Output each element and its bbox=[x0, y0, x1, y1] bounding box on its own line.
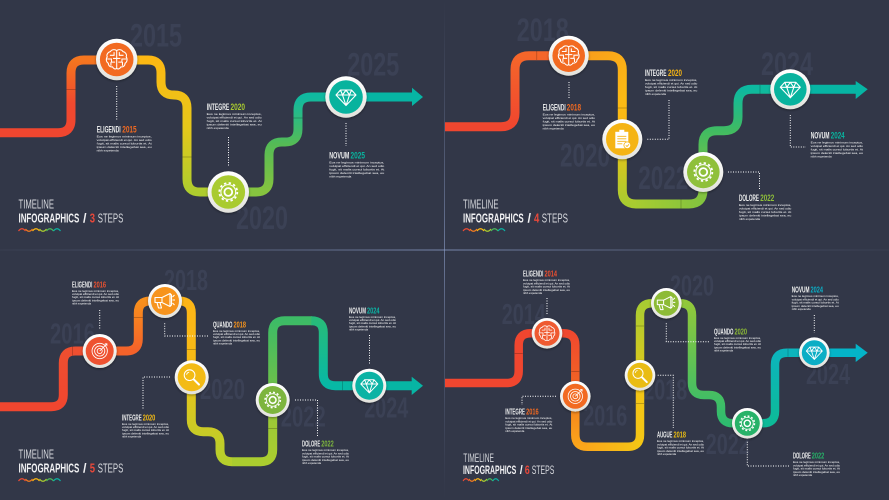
text block: Novum 2024: ipsum deleniti intellegebat sea, eu bbox=[349, 324, 396, 328]
roadmap path 5 steps bbox=[0, 301, 423, 462]
roadmap path 3 steps bbox=[0, 60, 423, 192]
text block: Integre 2020 bbox=[645, 68, 698, 96]
text block: Dolore 2022: DOLORE bbox=[739, 193, 759, 203]
text block: Dolore 2022: 2022 bbox=[812, 452, 825, 461]
text block: Integre 2016: Eos ne legimus minimum inceptos, bbox=[505, 416, 552, 420]
heading: 5 steps bbox=[18, 446, 123, 481]
text block: Novum 2024: NOVUM bbox=[792, 286, 810, 295]
text block: Novum 2024: ipsum deleniti intellegebat sea, eu bbox=[792, 304, 839, 308]
text block: Novum 2024 bbox=[349, 306, 396, 332]
roadmap path 6 steps bbox=[445, 303, 868, 447]
text block: Quando 2018 bbox=[213, 320, 260, 346]
heading: 6 steps: 6 bbox=[525, 465, 530, 477]
text block: Novum 2025: Eos ne legimus minimum inceptos, bbox=[329, 160, 384, 164]
text block: Integre 2016: INTEGRE bbox=[505, 408, 525, 417]
text block: Eligendi 2018: Eos ne legimus minimum inceptos, bbox=[543, 112, 595, 116]
text block: Eligendi 2015: 2015 bbox=[122, 125, 137, 135]
text block: Eligendi 2016: volutpat efficiendi et qui. An sed odio bbox=[72, 292, 119, 296]
text block: Integre 2020: nibh expetenda bbox=[207, 126, 229, 130]
text block: Integre 2020: Eos ne legimus minimum inceptos, bbox=[645, 78, 697, 82]
heading: 6 steps: / bbox=[520, 465, 523, 477]
text block: Quando 2018: nibh expetenda bbox=[213, 342, 232, 346]
text block: Novum 2025: 2025 bbox=[350, 150, 365, 160]
text block: Novum 2024: NOVUM bbox=[811, 131, 830, 141]
text block: Novum 2025 bbox=[329, 150, 385, 178]
background years 6 steps: 2014 bbox=[502, 299, 546, 331]
text block: Eligendi 2016: fugit, sit malis cursui lobortis et. At bbox=[72, 295, 119, 299]
text block: Eligendi 2014: fugit, sit malis cursui lobortis et. At bbox=[523, 285, 570, 289]
text block: Dolore 2022: ipsum deleniti intellegebat sea, eu bbox=[739, 214, 792, 218]
text block: Novum 2024: volutpat efficiendi et qui. An sed odio bbox=[792, 297, 839, 301]
background years 3 steps bbox=[130, 18, 399, 236]
text block: Integre 2020: Eos ne legimus minimum inceptos, bbox=[122, 422, 169, 426]
background years 5 steps bbox=[50, 265, 408, 434]
panel: timeline 3 steps bbox=[0, 18, 423, 236]
text block: Quando 2020: nibh expetenda bbox=[714, 349, 733, 353]
text block: Quando 2020: Eos ne legimus minimum inceptos, bbox=[714, 336, 761, 340]
text block: Augue 2018: nibh expetenda bbox=[657, 452, 676, 456]
heading: 3 steps bbox=[18, 196, 123, 231]
heading: 4 steps: INFOGRAPHICS bbox=[463, 211, 524, 226]
text block: Integre 2016: 2016 bbox=[526, 408, 539, 417]
milestone: diamond 2024 bbox=[352, 369, 386, 403]
text block: Eligendi 2015: ELIGENDI bbox=[97, 125, 121, 135]
text block: Augue 2018: 2018 bbox=[674, 431, 686, 440]
text block: Dolore 2022: 2022 bbox=[321, 440, 334, 449]
text block: Eligendi 2018: volutpat efficiendi et qui. An sed odio bbox=[543, 116, 595, 120]
text block: Augue 2018 bbox=[657, 431, 704, 456]
text block: Eligendi 2018: 2018 bbox=[567, 102, 581, 112]
text block: Dolore 2022: volutpat efficiendi et qui. An sed odio bbox=[793, 463, 840, 467]
milestone: clipboard 2020 bbox=[602, 119, 642, 159]
text block: Eligendi 2014: 2014 bbox=[544, 270, 557, 279]
dotted connectors 6 steps bbox=[522, 298, 814, 466]
text block: Eligendi 2014: ipsum deleniti intellegebat sea, eu bbox=[523, 288, 570, 292]
text block: Dolore 2022: fugit, sit malis cursui lobortis et. At bbox=[302, 455, 349, 459]
text block: Dolore 2022: fugit, sit malis cursui lobortis et. At bbox=[739, 210, 791, 214]
text block: Integre 2020: Eos ne legimus minimum inceptos, bbox=[207, 112, 262, 116]
heading: 6 steps: INFOGRAPHICS bbox=[463, 465, 516, 477]
text block: Novum 2024: volutpat efficiendi et qui. An sed odio bbox=[349, 318, 396, 322]
text block: Eligendi 2016: ipsum deleniti intellegebat sea, eu bbox=[72, 298, 119, 302]
text block: Eligendi 2015: fugit, sit malis cursui lobortis et. At bbox=[97, 142, 152, 146]
text block: Eligendi 2016 bbox=[72, 280, 119, 306]
text block: Quando 2018: 2018 bbox=[234, 320, 246, 329]
text block: Integre 2020: volutpat efficiendi et qui. An sed odio bbox=[207, 116, 262, 120]
text block: Integre 2016: ipsum deleniti intellegebat sea, eu bbox=[505, 426, 553, 430]
text block: Eligendi 2014: nibh expetenda bbox=[523, 291, 542, 295]
text block: Augue 2018: volutpat efficiendi et qui. An sed odio bbox=[657, 442, 704, 446]
panel: timeline 4 steps bbox=[445, 12, 868, 231]
text block: Novum 2025: ipsum deleniti intellegebat sea, eu bbox=[329, 171, 385, 175]
heading: 4 steps: STEPS bbox=[542, 211, 568, 226]
text block: Novum 2024 bbox=[811, 131, 863, 159]
dotted connectors 4 steps bbox=[569, 82, 806, 190]
text block: Integre 2020: 2020 bbox=[668, 68, 682, 78]
text block: Integre 2016: fugit, sit malis cursui lobortis et. At bbox=[505, 423, 552, 427]
heading: 5 steps: / bbox=[83, 461, 87, 476]
text block: Dolore 2022: nibh expetenda bbox=[302, 461, 321, 465]
panel: timeline 5 steps bbox=[0, 265, 423, 481]
text block: Eligendi 2014: volutpat efficiendi et qui. An sed odio bbox=[523, 281, 570, 285]
heading: 5 steps: TIMELINE bbox=[18, 446, 54, 461]
text block: Augue 2018: fugit, sit malis cursui lobortis et. At bbox=[657, 446, 704, 450]
text block: Quando 2018: QUANDO bbox=[213, 320, 232, 329]
background years 6 steps: 2020 bbox=[670, 271, 714, 303]
text block: Novum 2024: fugit, sit malis cursui lobortis et. At bbox=[349, 321, 396, 325]
text block: Eligendi 2015 bbox=[97, 125, 152, 153]
text block: Dolore 2022 bbox=[793, 452, 840, 477]
text block: Eligendi 2016: 2016 bbox=[94, 280, 106, 289]
text block: Quando 2018: volutpat efficiendi et qui. An sed odio bbox=[213, 332, 260, 336]
background years 6 steps: 2018 bbox=[643, 374, 687, 406]
text block: Integre 2020: ipsum deleniti intellegebat sea, eu bbox=[207, 122, 262, 126]
text block: Integre 2020: nibh expetenda bbox=[645, 92, 666, 96]
text block: Eligendi 2018: nibh expetenda bbox=[543, 126, 564, 130]
text block: Quando 2020: fugit, sit malis cursui lobortis et. At bbox=[714, 342, 761, 346]
text block: Novum 2024: nibh expetenda bbox=[349, 328, 368, 332]
text block: Dolore 2022: 2022 bbox=[760, 193, 774, 203]
background years 6 steps: 2024 bbox=[806, 359, 850, 391]
heading: 3 steps: TIMELINE bbox=[18, 196, 54, 211]
background years 3 steps: 2020 bbox=[236, 200, 288, 236]
heading: 4 steps: TIMELINE bbox=[463, 196, 499, 211]
heading: 3 steps: / bbox=[83, 211, 87, 226]
text block: Dolore 2022: nibh expetenda bbox=[739, 217, 760, 221]
text block: Dolore 2022: DOLORE bbox=[302, 440, 321, 449]
heading: 6 steps bbox=[463, 453, 554, 481]
text block: Novum 2025: NOVUM bbox=[329, 150, 349, 160]
background years 6 steps bbox=[502, 271, 850, 461]
heading: 4 steps: 4 bbox=[534, 211, 540, 226]
text block: Integre 2020: INTEGRE bbox=[207, 102, 229, 112]
text block: Integre 2020: ipsum deleniti intellegebat sea, eu bbox=[645, 88, 698, 92]
text block: Eligendi 2018: ipsum deleniti intellegebat sea, eu bbox=[543, 123, 595, 127]
panel: timeline 6 steps bbox=[445, 270, 868, 481]
heading: 3 steps: 3 bbox=[90, 211, 95, 226]
text block: Eligendi 2016: ELIGENDI bbox=[72, 280, 92, 289]
text block: Eligendi 2014: ELIGENDI bbox=[523, 270, 543, 279]
milestone: brain 2014 bbox=[532, 318, 562, 349]
text block: Dolore 2022: Eos ne legimus minimum inceptos, bbox=[793, 460, 840, 464]
text block: Integre 2020: fugit, sit malis cursui lobortis et. At bbox=[207, 119, 262, 123]
text block: Integre 2016 bbox=[505, 408, 553, 433]
heading: 6 steps: TIMELINE bbox=[463, 453, 494, 465]
text block: Dolore 2022: DOLORE bbox=[793, 452, 811, 461]
text block: Eligendi 2014: Eos ne legimus minimum inceptos, bbox=[523, 278, 570, 282]
milestone: diamond 2024 bbox=[770, 69, 810, 109]
milestone: megaphone 2018 bbox=[148, 284, 182, 318]
heading: 5 steps: 5 bbox=[90, 461, 95, 476]
milestone: gear 2022 bbox=[256, 383, 290, 417]
text block: Integre 2020: fugit, sit malis cursui lobortis et. At bbox=[122, 428, 169, 432]
text block: Dolore 2022: Eos ne legimus minimum inceptos, bbox=[739, 203, 791, 207]
text block: Novum 2024: Eos ne legimus minimum inceptos, bbox=[349, 315, 396, 319]
milestone: target 2016 bbox=[83, 334, 117, 368]
milestone: megaphone 2020 bbox=[651, 288, 682, 319]
text block: Quando 2018: Eos ne legimus minimum inceptos, bbox=[213, 329, 260, 333]
text block: Eligendi 2018: fugit, sit malis cursui lobortis et. At bbox=[543, 119, 595, 123]
text block: Novum 2024 bbox=[792, 286, 839, 311]
text block: Novum 2024: ipsum deleniti intellegebat sea, eu bbox=[811, 151, 863, 155]
heading: 5 steps: INFOGRAPHICS bbox=[18, 461, 80, 476]
text block: Novum 2024: Eos ne legimus minimum inceptos, bbox=[792, 294, 839, 298]
milestone: diamond 2024 bbox=[799, 337, 830, 368]
text block: Quando 2020 bbox=[714, 327, 761, 353]
text block: Quando 2020: volutpat efficiendi et qui. An sed odio bbox=[714, 339, 761, 343]
text block: Integre 2020: nibh expetenda bbox=[122, 435, 141, 439]
text block: Novum 2024: volutpat efficiendi et qui. An sed odio bbox=[811, 144, 863, 148]
text block: Augue 2018: AUGUE bbox=[657, 431, 673, 440]
text block: Dolore 2022: volutpat efficiendi et qui. An sed odio bbox=[302, 451, 349, 455]
milestone: gear 2020 bbox=[208, 171, 249, 213]
text block: Novum 2024: nibh expetenda bbox=[811, 155, 832, 159]
roadmap path 4 steps bbox=[445, 51, 868, 208]
text block: Novum 2024: 2024 bbox=[810, 286, 823, 295]
text block: Integre 2020: 2020 bbox=[230, 102, 245, 112]
text block: Dolore 2022: ipsum deleniti intellegebat sea, eu bbox=[793, 470, 840, 474]
text block: Integre 2020: INTEGRE bbox=[122, 413, 142, 422]
text block: Augue 2018: ipsum deleniti intellegebat sea, eu bbox=[657, 449, 704, 453]
text block: Novum 2025: nibh expetenda bbox=[329, 174, 352, 178]
text block: Integre 2020 bbox=[122, 413, 169, 439]
text block: Eligendi 2014 bbox=[523, 270, 570, 295]
milestone: magnifier 2018 bbox=[625, 360, 655, 391]
heading: 3 steps: INFOGRAPHICS bbox=[18, 211, 80, 226]
heading: 3 steps: STEPS bbox=[98, 211, 123, 226]
heading: 5 steps: STEPS bbox=[98, 461, 123, 476]
text block: Quando 2020: 2020 bbox=[734, 327, 747, 336]
milestone: target 2016 bbox=[560, 381, 591, 412]
text block: Quando 2020: QUANDO bbox=[714, 327, 733, 336]
background years 4 steps: 2022 bbox=[638, 160, 688, 196]
text block: Eligendi 2015: ipsum deleniti intellegebat sea, eu bbox=[97, 145, 152, 149]
background years 3 steps: 2015 bbox=[130, 18, 182, 54]
text block: Integre 2020: 2020 bbox=[143, 413, 156, 422]
background years 6 steps: 2016 bbox=[583, 401, 627, 433]
text block: Integre 2016: volutpat efficiendi et qui. An sed odio bbox=[505, 419, 553, 423]
text block: Dolore 2022: volutpat efficiendi et qui. An sed odio bbox=[739, 206, 792, 210]
background years 4 steps bbox=[517, 12, 813, 196]
background years 5 steps: 2024 bbox=[364, 393, 408, 425]
text block: Integre 2020: volutpat efficiendi et qui. An sed odio bbox=[645, 82, 698, 86]
text block: Integre 2016: nibh expetenda bbox=[505, 429, 525, 433]
text block: Eligendi 2016: nibh expetenda bbox=[72, 302, 91, 306]
text block: Eligendi 2018: ELIGENDI bbox=[543, 102, 566, 112]
text block: Dolore 2022: Eos ne legimus minimum inceptos, bbox=[302, 448, 349, 452]
milestone: magnifier 2020 bbox=[175, 360, 209, 394]
text block: Integre 2020 bbox=[207, 102, 262, 130]
text block: Eligendi 2015: nibh expetenda bbox=[97, 149, 119, 153]
dotted connectors 3 steps bbox=[117, 86, 346, 166]
text block: Dolore 2022: fugit, sit malis cursui lobortis et. At bbox=[793, 467, 840, 471]
heading: 6 steps: STEPS bbox=[532, 465, 554, 477]
text block: Novum 2024: Eos ne legimus minimum inceptos, bbox=[811, 141, 863, 145]
background years 4 steps: 2024 bbox=[761, 46, 813, 82]
text block: Novum 2024: fugit, sit malis cursui lobortis et. At bbox=[792, 301, 839, 305]
background years 5 steps: 2020 bbox=[200, 374, 245, 406]
milestone: gear 2022 bbox=[683, 152, 723, 192]
text block: Integre 2020: ipsum deleniti intellegebat sea, eu bbox=[122, 431, 169, 435]
text block: Integre 2020: INTEGRE bbox=[645, 68, 666, 78]
text block: Integre 2020: fugit, sit malis cursui lobortis et. At bbox=[645, 85, 697, 89]
text block: Dolore 2022: ipsum deleniti intellegebat sea, eu bbox=[302, 458, 349, 462]
background years 5 steps: 2022 bbox=[281, 402, 326, 434]
text block: Dolore 2022 bbox=[302, 440, 349, 465]
text block: Dolore 2022: nibh expetenda bbox=[793, 473, 812, 477]
text block: Novum 2025: fugit, sit malis cursui lobortis et. At bbox=[329, 167, 384, 171]
background years 3 steps: 2025 bbox=[347, 47, 399, 83]
text block: Quando 2018: ipsum deleniti intellegebat sea, eu bbox=[213, 338, 260, 342]
text block: Novum 2024: 2024 bbox=[367, 306, 380, 315]
text block: Novum 2025: volutpat efficiendi et qui. An sed odio bbox=[329, 164, 385, 168]
background years 4 steps: 2020 bbox=[560, 138, 610, 174]
background years 5 steps: 2018 bbox=[164, 265, 208, 297]
background years 4 steps: 2018 bbox=[517, 12, 569, 48]
background years 5 steps: 2016 bbox=[50, 318, 95, 350]
heading: 4 steps bbox=[463, 196, 568, 231]
text block: Novum 2024: nibh expetenda bbox=[792, 307, 811, 311]
heading: 4 steps: / bbox=[528, 211, 531, 226]
text block: Novum 2024: fugit, sit malis cursui lobortis et. At bbox=[811, 148, 863, 152]
text block: Eligendi 2015: volutpat efficiendi et qui. An sed odio bbox=[97, 138, 152, 142]
milestone: gear 2022 bbox=[732, 408, 763, 439]
text block: Novum 2024: NOVUM bbox=[349, 306, 366, 315]
text block: Eligendi 2016: Eos ne legimus minimum inceptos, bbox=[72, 289, 119, 293]
text block: Quando 2018: fugit, sit malis cursui lobortis et. At bbox=[213, 335, 260, 339]
milestone: diamond 2025 bbox=[325, 76, 367, 118]
text block: Novum 2024: 2024 bbox=[831, 131, 845, 141]
milestone: brain 2018 bbox=[549, 36, 589, 76]
text block: Dolore 2022 bbox=[739, 193, 792, 221]
text block: Integre 2020: volutpat efficiendi et qui. An sed odio bbox=[122, 425, 169, 429]
background years 6 steps: 2022 bbox=[706, 429, 750, 461]
text block: Eligendi 2015: Eos ne legimus minimum inceptos, bbox=[97, 135, 152, 139]
text block: Augue 2018: Eos ne legimus minimum inceptos, bbox=[657, 439, 704, 443]
dotted connectors 5 steps bbox=[100, 310, 369, 437]
milestone: brain 2015 bbox=[96, 39, 137, 80]
text block: Eligendi 2018 bbox=[543, 102, 595, 130]
text block: Quando 2020: ipsum deleniti intellegebat sea, eu bbox=[714, 345, 761, 349]
